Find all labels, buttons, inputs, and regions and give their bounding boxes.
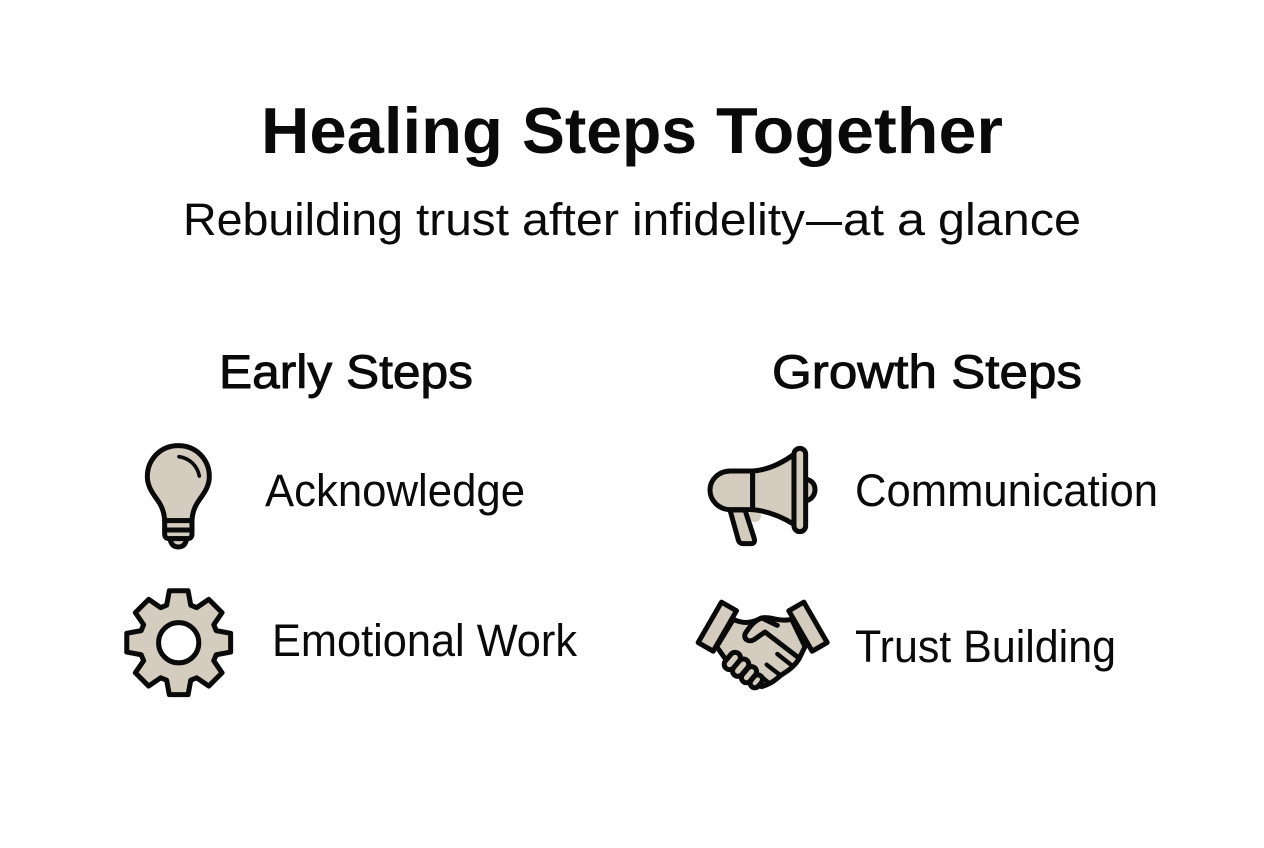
- subtitle: a: [897, 194, 926, 245]
- label: emotional work: Emotional Work: [272, 615, 577, 666]
- subtitle: glance: [938, 194, 1081, 245]
- heading: early steps: Early Steps: [219, 345, 473, 398]
- icon: light bulb: [147, 446, 209, 547]
- subtitle: trust: [416, 194, 510, 245]
- title: Healing: [261, 94, 503, 167]
- label: acknowledge: Acknowledge: [265, 465, 525, 516]
- label: communication: Communication: [855, 465, 1158, 516]
- panel: growth steps: [698, 345, 1158, 690]
- subtitle: infidelity: [632, 194, 806, 245]
- icon: gear: [127, 591, 231, 695]
- subtitle: Rebuilding: [183, 194, 403, 245]
- icon: handshake: [698, 602, 827, 690]
- panel: early steps: [127, 345, 577, 695]
- subtitle: —: [806, 194, 842, 245]
- subtitle: after: [522, 194, 619, 245]
- icon: megaphone: [710, 448, 815, 544]
- subtitle: [183, 194, 1081, 245]
- title: Steps: [522, 94, 697, 167]
- title: Together: [716, 94, 1003, 167]
- subtitle: at: [843, 194, 885, 245]
- label: trust building: Trust Building: [855, 621, 1116, 672]
- title: [261, 94, 1003, 167]
- heading: growth steps: Growth Steps: [772, 345, 1082, 398]
